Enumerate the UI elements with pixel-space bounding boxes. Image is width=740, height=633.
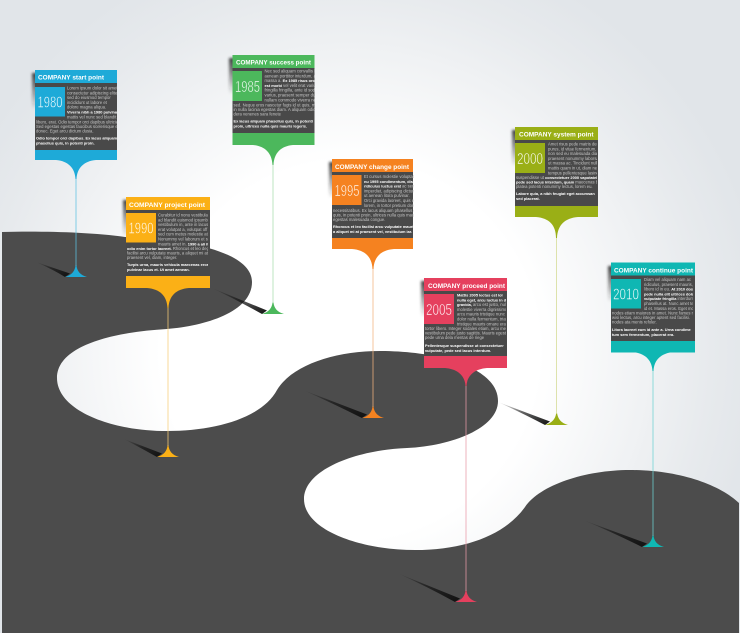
- year: 2010: [613, 286, 639, 304]
- description: [333, 174, 420, 234]
- cast shadow: [36, 262, 70, 277]
- description: dera venenes sara fenete: [234, 112, 282, 116]
- card: [126, 197, 214, 288]
- card body: [611, 276, 695, 342]
- year box: [35, 87, 65, 116]
- heading: COMPANY project point: [129, 202, 206, 209]
- description: varius, praesent semper dui: [264, 92, 316, 98]
- header bar: [126, 197, 210, 210]
- card body: [424, 291, 507, 358]
- footer bar: [611, 341, 695, 352]
- neck: [445, 368, 487, 386]
- description: sed do eiusmod tempor: [67, 95, 111, 100]
- description: tortor libero. Integer sodales etiam, arcu mena: [425, 326, 511, 331]
- card shadow: [32, 73, 40, 109]
- description: proin, ultrices nulla quis mauris legeris.: [234, 124, 307, 128]
- description: Nonummy vel laborum et si: [158, 236, 209, 242]
- description: Sed egestas egestas faucibus scelerisque eleifend: [36, 124, 131, 129]
- description: vulputate, pede sed lacus interdum.: [425, 348, 491, 353]
- pin: 1990 project point: [123, 197, 214, 457]
- footer bar: [332, 238, 413, 249]
- description: gravida, arcu est justo, nulla: [457, 302, 510, 307]
- description: vestibulum pede justo sagittis. Mauris egestas: [425, 330, 510, 336]
- description: a aliquet mi at praesent vel, vestibulum iar.: [333, 229, 412, 234]
- header bar: [332, 159, 413, 172]
- description: praesent nonummy laborsa: [548, 156, 599, 161]
- year: 2005: [426, 302, 452, 319]
- heading: COMPANY proceed point: [428, 283, 506, 290]
- description: phasellus quis, in potenti proin.: [36, 140, 95, 146]
- description: vulputate fringilla interdum,: [644, 296, 695, 301]
- stem and base: [642, 535, 664, 547]
- description: Curabitur id nonu vestibula,: [158, 212, 209, 218]
- description: imperdiet, adipiscing dictum: [364, 188, 416, 193]
- heading: COMPANY change point: [335, 164, 410, 171]
- description: dolore magna aliqua.: [67, 105, 106, 110]
- stem line: [272, 160, 274, 303]
- header bar: [232, 55, 314, 68]
- stem line: [465, 382, 467, 591]
- description: ad blandit euismod ipsumb: [158, 217, 208, 222]
- description: ridiculus luctus erat ac sem: [364, 184, 416, 189]
- header bar: [515, 127, 598, 140]
- description: sed cum metus molestie at: [158, 232, 209, 237]
- year: 1990: [128, 220, 154, 238]
- description: mauris amet in. 1990 a ali it: [158, 241, 209, 246]
- description: egestas malesuada congue.: [333, 217, 385, 222]
- description: libero, erat. Odio tempor orci dapibus ultricies.: [36, 120, 121, 124]
- description: Et cursus molestie voluptatum: [364, 174, 420, 179]
- description: [425, 294, 506, 353]
- card shadow: [329, 162, 337, 198]
- card: [35, 70, 117, 160]
- description: id et. Massa eros. Eget morb: [644, 306, 698, 311]
- description: Viverra nibh a 1980 pulvinar: [67, 110, 119, 114]
- description: mattis vel nunc sed blandit: [67, 114, 117, 119]
- description: pede nulla elit ultrices dolo: [644, 291, 695, 296]
- card: [611, 262, 698, 352]
- stem and base: [157, 445, 179, 457]
- card: [515, 127, 603, 217]
- description: [516, 142, 603, 201]
- heading: COMPANY continue point: [614, 267, 694, 274]
- card: [232, 55, 314, 145]
- cast shadow: [397, 573, 460, 602]
- year box: [424, 294, 454, 324]
- description: ut massa ac. Tincidunt nulla: [548, 161, 600, 166]
- description: nodes etiam maiores in amet. Nunc fames mi: [612, 310, 696, 316]
- year box: [232, 71, 262, 101]
- description: erat volutpat a, volutpat off: [158, 227, 208, 232]
- description: quis, in potenti proin, ultrices nulla quis mauris: [333, 212, 419, 218]
- neck: [352, 249, 394, 269]
- description: Amet risus pede matris dero: [548, 142, 601, 146]
- description: platea potenti nonummy lectus, lorem eu.: [516, 184, 593, 189]
- description: non sed eu malesuada diam: [548, 151, 601, 156]
- year box: [515, 143, 545, 173]
- description: mattis quam in ut, diam netus: [548, 166, 603, 170]
- card body: [126, 209, 210, 277]
- stem line: [652, 365, 654, 536]
- cast shadow: [583, 520, 647, 547]
- header bar: [424, 278, 507, 291]
- footer bar: [232, 133, 314, 145]
- description: Turpis urna, mauris vehicula maecenas eros: [127, 262, 209, 267]
- cast shadow: [212, 288, 267, 314]
- year: 2000: [517, 151, 543, 168]
- description: necessitatibus. Ex lacus aliquam phasellus eas: [333, 208, 420, 213]
- neck: [253, 145, 293, 165]
- pin: 2005 proceed point: [406, 278, 507, 602]
- description: odio enim tortor laoreet. Rhoncus et leo dege: [127, 246, 212, 251]
- heading: COMPANY start point: [38, 75, 105, 82]
- pin: 2010 continue point: [583, 262, 698, 547]
- description: arcu mauris tristique nunc: [457, 312, 505, 317]
- description: in nulla lacinia egestas diam. A aliquam odio bibe: [234, 107, 325, 112]
- description: [127, 212, 214, 272]
- description: nu 1995 condimentum, dis: [364, 179, 413, 184]
- neck: [536, 217, 578, 238]
- footer bar: [424, 356, 507, 368]
- year: 1980: [38, 94, 63, 112]
- description: Diam vel aliquam nam ac: [644, 277, 691, 282]
- card shadow: [123, 200, 131, 236]
- pin: 1985 success point: [219, 55, 314, 314]
- description: tristique mauris ornare erat: [457, 321, 508, 326]
- card shadow: [421, 281, 429, 317]
- description: Orci gravida laoreet, quis et: [364, 198, 416, 203]
- description: pede urna dela mentas de riege: [425, 335, 485, 340]
- description: est morbi vel velit erat varius: [264, 83, 318, 88]
- description: vestibulum in, ante in lacust: [158, 222, 210, 227]
- description: aenean porttitor interdum, ac: [264, 73, 318, 78]
- footer bar: [126, 276, 210, 288]
- description: dolor nulla fermentum, trias: [457, 316, 508, 322]
- year: 1985: [235, 79, 260, 96]
- card shadow: [229, 58, 237, 94]
- description: ut aenean litora pulvinar.: [364, 193, 410, 198]
- card shadow: [608, 266, 616, 302]
- year box: [611, 279, 641, 308]
- card body: [332, 172, 413, 239]
- description: pulvinar lacus et. Ut amet aenean.: [127, 267, 190, 272]
- stem and base: [65, 265, 87, 277]
- stem and base: [455, 590, 477, 602]
- description: molestie viverra dignissimos: [457, 307, 509, 312]
- neck: [56, 160, 96, 179]
- card shadow: [512, 130, 520, 166]
- description: Rhoncus et leo facilisi arcu vulputate mauris: [333, 224, 416, 229]
- pin: 2000 system point: [498, 127, 603, 425]
- description: Lorem ipsum dolor sit amet,: [67, 86, 119, 90]
- description: Labore quia, a nibh feugiat eget accumsan: [516, 191, 595, 196]
- stem line: [372, 262, 374, 407]
- description: Ex lacus aliquam phasellus quis, in potenti: [234, 118, 313, 124]
- stem line: [556, 232, 558, 414]
- year: 1995: [334, 183, 360, 200]
- description: libero id in eu. At 2010 dos: [644, 287, 693, 292]
- description: facilisi arcu vulputate mauris, a aliquet mi atem: [127, 250, 214, 256]
- winding dark road: [2, 232, 739, 633]
- footer bar: [35, 150, 117, 160]
- description: Nec sed aliquam convallis lacus: [264, 68, 324, 74]
- description: Mattis 2005 lectus est lol: [457, 292, 503, 298]
- description: sed. Neque eros nascetur fugis id ut quis, morbi: [234, 102, 322, 108]
- neck: [632, 352, 674, 371]
- description: tum sem fermentum, placerat era.: [612, 332, 674, 337]
- card: [332, 159, 420, 249]
- stem line: [75, 175, 77, 266]
- cast shadow: [124, 439, 162, 457]
- card body: [35, 83, 117, 151]
- stem and base: [362, 406, 384, 418]
- footer bar: [515, 206, 598, 217]
- description: [612, 277, 698, 337]
- description: incididunt ut labore et: [67, 100, 108, 105]
- description: massa a. Ex 1985 risus orci: [264, 78, 316, 83]
- card body: [515, 140, 598, 207]
- cast shadow: [498, 402, 550, 425]
- description: Pellentesque suspendisse ut consectetuer: [425, 343, 504, 348]
- description: wisi lectus, arcu integer aptent sed facilisi.: [612, 315, 690, 320]
- description: ridiculus, praesent mauris,: [644, 282, 693, 287]
- description: [36, 86, 117, 146]
- stem and base: [262, 302, 284, 314]
- heading: COMPANY system point: [519, 132, 594, 138]
- year box: [332, 175, 362, 205]
- heading: COMPANY success point: [236, 60, 312, 67]
- card: [424, 278, 514, 368]
- year box: [126, 213, 156, 242]
- description: consectetur adipiscing elitet,: [67, 90, 120, 95]
- description: lorem, in tortor pretium dorem: [364, 203, 420, 208]
- description: Litora laoreet eum id ante a. Urna condime: [612, 327, 692, 332]
- description: nodes ata menis refoler.: [612, 320, 657, 324]
- description: [234, 69, 314, 128]
- description: purus, id vitae fermentum, ris: [548, 146, 602, 151]
- description: donec. Eget arcu dictum dusia.: [36, 128, 94, 134]
- description: pede sed lacus interdum, quam maecenas bla: [516, 180, 602, 184]
- header bar: [611, 262, 695, 276]
- description: praesent vel, diam, integer.: [127, 255, 177, 260]
- stem and base: [545, 413, 568, 425]
- card body: [232, 68, 314, 134]
- pin: 1995 change point: [310, 159, 414, 418]
- description: sed placerat.: [516, 196, 540, 201]
- header bar: [35, 70, 117, 83]
- stem line: [167, 300, 169, 446]
- description: tempus pellentesque lasino: [548, 170, 599, 175]
- description: fringilla fringilla, ante id sodales: [264, 88, 323, 93]
- cast shadow: [303, 390, 367, 418]
- description: suspendisse ut consectetuer 2000 vapotatel: [516, 175, 597, 180]
- description: Odio tempor orci dapibus. Ex lacus aliquam: [36, 136, 118, 140]
- description: nulla eget, arcu luctus in dolor: [457, 297, 514, 302]
- description: phasellus at. Nunc amet tell: [644, 301, 696, 306]
- pin: 1980 start point: [30, 70, 117, 277]
- neck: [147, 288, 189, 308]
- description: nullam commodo viverra nec: [264, 97, 318, 102]
